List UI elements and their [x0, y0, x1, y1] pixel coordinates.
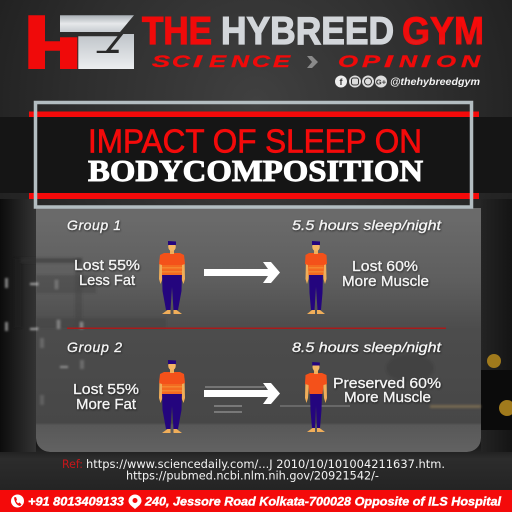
figure: group 2 after — [305, 362, 327, 432]
tagline: O — [436, 52, 456, 71]
tagline: C — [172, 52, 191, 71]
social handles — [335, 76, 480, 88]
tagline: E — [209, 52, 227, 71]
gym background behind panel — [0, 199, 512, 459]
tagline: S — [152, 52, 171, 71]
icon: phone — [11, 494, 24, 508]
figure: group 2 before — [159, 360, 185, 433]
group 1 labels: Lost 55% — [74, 258, 140, 274]
contact bar: 240, Jessore Road Kolkata-700028 Opposite of ILS Hospital — [144, 494, 502, 508]
brand name: THE — [142, 10, 212, 53]
group 1 labels: More Muscle — [342, 274, 429, 290]
references — [62, 457, 445, 482]
contact bar: +91 8013409133 — [28, 494, 124, 508]
tagline: I — [421, 52, 432, 71]
group 1 labels: Lost 60% — [352, 259, 418, 275]
references: Ref: — [62, 457, 83, 471]
contact bar — [0, 490, 512, 512]
arrow: group 1 — [204, 262, 280, 283]
tagline — [152, 52, 481, 71]
references: https://www.sciencedaily.com/...J 2010/10/101004211637.htm. — [86, 457, 445, 471]
icon: location pin — [128, 494, 142, 509]
figure: group 1 after — [305, 241, 327, 314]
tagline: C — [252, 52, 271, 71]
group 2 labels: More Fat — [76, 397, 136, 413]
group 2 labels — [67, 339, 442, 413]
tagline: I — [384, 52, 395, 71]
references: https://pubmed.ncbi.nlm.nih.gov/20921542/- — [126, 468, 379, 482]
group 1 labels: Less Fat — [79, 273, 135, 289]
brand name: HYBREED — [221, 10, 394, 53]
figure: group 1 before — [159, 241, 185, 314]
tagline: N — [461, 52, 481, 71]
tagline: N — [231, 52, 250, 71]
tagline: I — [193, 52, 204, 71]
brand name — [142, 10, 484, 53]
group 2 labels: Lost 55% — [73, 382, 139, 398]
social handles: f — [340, 77, 344, 87]
group 1 labels — [67, 217, 442, 290]
group 2 labels: Preserved 60% — [333, 376, 441, 392]
title banner — [0, 102, 512, 207]
arrow: group 2 — [204, 383, 280, 404]
social handles: G+ — [376, 78, 387, 86]
group 2 labels: Group 2 — [67, 339, 122, 355]
logo mark — [28, 15, 134, 69]
tagline: N — [399, 52, 418, 71]
bottom dark strip — [0, 438, 512, 490]
tagline: O — [338, 52, 358, 71]
tagline: E — [273, 52, 291, 71]
divider — [67, 328, 446, 329]
tagline: P — [362, 52, 381, 71]
group 1 labels: 5.5 hours sleep/night — [292, 217, 442, 233]
group 2 labels: 8.5 hours sleep/night — [292, 339, 442, 355]
heading line 2: BODYCOMPOSITION — [88, 153, 423, 188]
heading line 1: IMPACT OF SLEEP ON — [88, 122, 422, 160]
brand name: GYM — [402, 10, 484, 53]
group 2 labels: More Muscle — [344, 390, 431, 406]
group 1 labels: Group 1 — [67, 217, 121, 233]
social handles: @thehybreedgym — [390, 77, 480, 88]
